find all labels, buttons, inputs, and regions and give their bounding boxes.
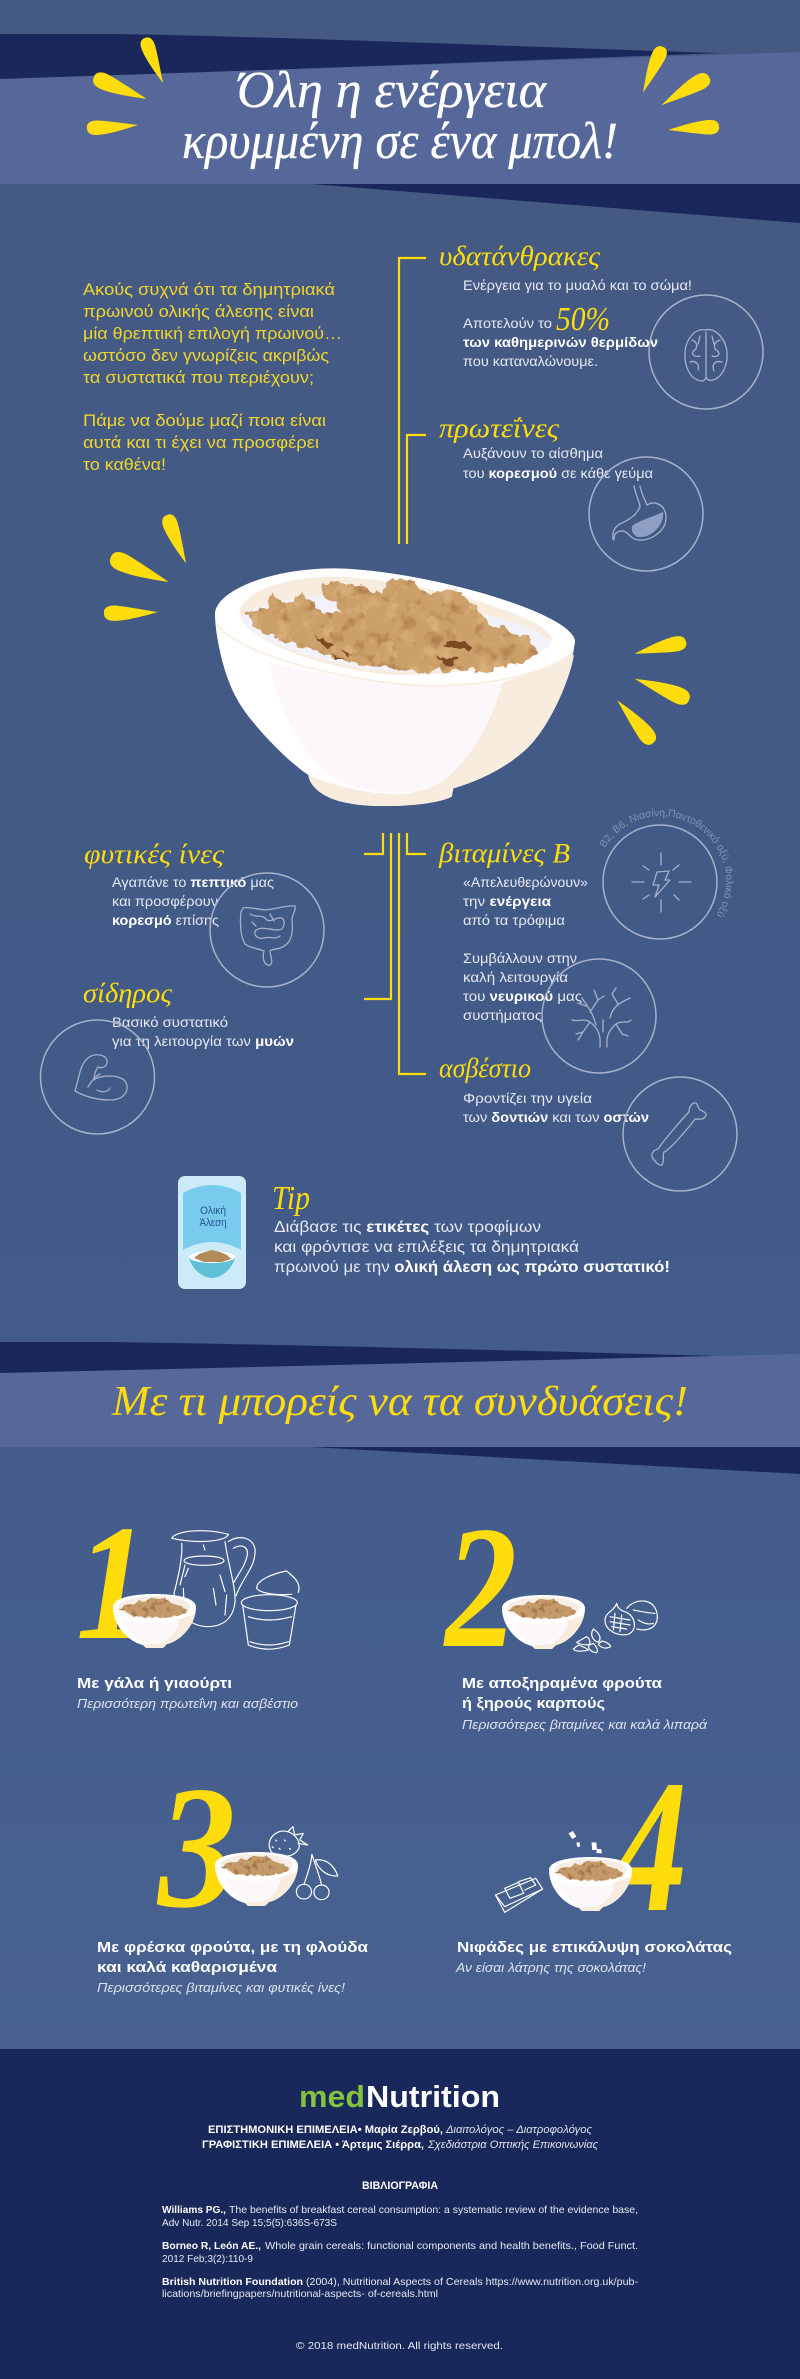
text: carbohydrates: που καταναλώνουμε.: [463, 353, 598, 369]
tip text: πρωινού με την ολική άλεση ως πρώτο συστατικό!: [274, 1259, 670, 1276]
caption 2: ή ξηρούς καρπούς: [462, 1695, 605, 1712]
card bowl: [189, 1250, 235, 1278]
card label: Άλεση: [200, 1217, 226, 1229]
text: fibre: κορεσμό επίσης: [112, 912, 219, 928]
caption 4: Νιφάδες με επικάλυψη σοκολάτας: [457, 1939, 732, 1956]
caption 4: [455, 1939, 732, 1975]
caption 3: Περισσότερες βιταμίνες και φυτικές ίνες!: [97, 1980, 345, 1995]
references: Williams PG.,: [162, 2204, 226, 2216]
tip text: Διάβασε τις ετικέτες των τροφίμων: [274, 1219, 541, 1236]
icon: rays left of bowl: [104, 512, 193, 621]
panel: iron: [40, 978, 294, 1134]
icon: brain: [649, 295, 763, 409]
intro text: πρωινού ολικής άλεσης είναι: [83, 303, 314, 321]
credits: Σχεδιάστρια Οπτικής Επικοινωνίας: [427, 2139, 599, 2151]
text: vitamins B: την ενέργεια: [463, 893, 551, 909]
text: carbohydrates: Ενέργεια για το μυαλό και το σώμα!: [463, 277, 692, 293]
icon: title rays right: [636, 44, 720, 137]
icon: rays right of bowl: [611, 634, 692, 748]
logo: Nutrition: [366, 2079, 500, 2114]
text: calcium: [463, 1090, 649, 1125]
icon: bone: [623, 1077, 737, 1191]
text: fibre: Αγαπάνε το πεπτικό μας: [112, 874, 274, 890]
combo 3: [97, 1750, 369, 1995]
text: vitamins B: Συμβάλλουν στην: [463, 950, 577, 966]
intro text: Ακούς συχνά ότι τα δημητριακά: [83, 281, 336, 299]
references: Adv Nutr. 2014 Sep 15;5(5):636S-673S: [162, 2217, 337, 2229]
icon: energy bolt: [603, 825, 717, 939]
card label: Ολική: [200, 1205, 226, 1217]
caption 2: [462, 1675, 708, 1732]
second band: [0, 1342, 800, 1474]
card label: [200, 1205, 226, 1229]
icon: strawberry and cherries: [269, 1827, 338, 1900]
caption 2: Περισσότερες βιταμίνες και καλά λιπαρά: [462, 1717, 708, 1732]
caption 1: [77, 1675, 298, 1711]
footer panel: [0, 2049, 800, 2379]
icon: intestines: [210, 873, 324, 987]
title: [182, 62, 618, 170]
references: British Nutrition Foundation: [162, 2276, 303, 2288]
caption 3: και καλά καθαρισμένα: [97, 1959, 278, 1976]
intro text: ωστόσο δεν γνωρίζεις ακριβώς: [83, 347, 329, 365]
caption 3: [97, 1939, 369, 1995]
credits: [202, 2124, 599, 2151]
intro text: [83, 281, 342, 474]
combo 4: [455, 1742, 732, 1975]
text: calcium: των δοντιών και των οστών: [463, 1109, 649, 1125]
small bowl: [215, 1852, 298, 1906]
text: iron: για τη λειτουργία των μυών: [112, 1033, 294, 1049]
panel: fibre: [84, 839, 324, 987]
intro text: Πάμε να δούμε μαζί ποια είναι: [83, 412, 326, 430]
icon: jug and yogurt: [172, 1531, 299, 1649]
text: proteins: [463, 445, 653, 481]
panel: proteins: [439, 413, 703, 571]
upper brackets: [399, 258, 426, 544]
text: vitamins B: «Απελευθερώνουν»: [463, 874, 588, 890]
text: carbohydrates: Αποτελούν το: [463, 315, 552, 331]
references: lications/briefingpapers/nutritional-aspects- of-cereals.html: [162, 2288, 438, 2300]
intro text: το καθένα!: [83, 456, 166, 474]
references: [162, 2204, 639, 2300]
small bowl: [502, 1595, 585, 1649]
references: The benefits of breakfast cereal consumption: a systematic review of the evidence base,: [229, 2204, 638, 2216]
small bowl: [113, 1594, 196, 1648]
heading: proteins: πρωτεΐνες: [439, 413, 560, 443]
intro text: μία θρεπτική επιλογή πρωινού…: [83, 325, 342, 343]
icon: nervous system: [542, 959, 656, 1073]
text: vitamins B: του νευρικού μας: [463, 988, 582, 1004]
tip text: και φρόντισε να επιλέξεις τα δημητριακά: [274, 1239, 579, 1256]
heading: tip: Tip: [272, 1180, 310, 1217]
combo 2: [443, 1490, 708, 1732]
combo 1: [76, 1491, 299, 1711]
icon: title rays left: [86, 35, 169, 136]
icon: chocolate and flakes: [495, 1831, 602, 1912]
panel: calcium: [439, 1053, 737, 1191]
curved label: B vitamins list: Β2, Β6, Νιασίνη,Παντοθενικό οξύ, Φολικό οξύ: [599, 808, 734, 918]
references: Borneo R, León AE.,: [162, 2240, 261, 2252]
tip card: [178, 1176, 246, 1289]
text: iron: [112, 1014, 294, 1049]
text: proteins: Αυξάνουν το αίσθημα: [463, 445, 603, 461]
heading: calcium: ασβέστιο: [439, 1053, 531, 1083]
heading: vitamins B: βιταμίνες Β: [438, 838, 570, 868]
number 1: 1: [76, 1491, 148, 1674]
intro text: τα συστατικά που περιέχουν;: [83, 369, 314, 387]
number 2: 2: [443, 1490, 517, 1684]
section heading: Με τι μπορείς να τα συνδυάσεις!: [111, 1379, 688, 1425]
heading: iron: σίδηρος: [83, 978, 173, 1008]
text: vitamins B: καλή λειτουργία: [463, 969, 568, 985]
icon: figs and almonds: [573, 1601, 657, 1653]
icon: stomach: [589, 457, 703, 571]
caption 2: Με αποξηραμένα φρούτα: [462, 1675, 663, 1692]
caption 3: Με φρέσκα φρούτα, με τη φλούδα: [97, 1939, 369, 1956]
icon: muscle arm: [40, 1020, 154, 1134]
heading: carbohydrates: υδατάνθρακες: [439, 241, 601, 271]
text: vitamins B: [463, 874, 588, 1023]
lower brackets: [364, 833, 426, 1074]
bibliography heading: ΒΙΒΛΙΟΓΡΑΦΙΑ: [362, 2180, 438, 2192]
references: Whole grain cereals: functional components and health benefits., Food Funct.: [265, 2240, 638, 2252]
references: 2012 Feb;3(2):110-9: [162, 2253, 253, 2265]
copyright: © 2018 medNutrition. All rights reserved.: [296, 2340, 503, 2352]
credits: ΕΠΙΣΤΗΜΟΝΙΚΗ ΕΠΙΜΕΛΕΙΑ• Μαρία Ζερβού,: [208, 2124, 443, 2136]
intro text: αυτά και τι έχει να προσφέρει: [83, 434, 319, 452]
text: calcium: Φροντίζει την υγεία: [463, 1090, 592, 1106]
caption 1: Περισσότερη πρωτεΐνη και ασβέστιο: [77, 1696, 298, 1711]
heading: fibre: φυτικές ίνες: [84, 839, 225, 869]
title: Όλη η ενέργεια: [237, 62, 548, 119]
number 4: 4: [613, 1742, 687, 1952]
credits: ΓΡΑΦΙΣΤΙΚΗ ΕΠΙΜΕΛΕΙΑ • Άρτεμις Σιέρρα,: [202, 2139, 424, 2151]
bowl of cereal: [215, 568, 575, 806]
tip text: [272, 1180, 670, 1276]
panel: vitamins B: [438, 808, 734, 1074]
number 3: 3: [156, 1750, 236, 1944]
panel: carbohydrates: [439, 241, 763, 409]
caption 4: Αν είσαι λάτρης της σοκολάτας!: [455, 1960, 646, 1975]
text: fibre: [112, 874, 274, 928]
text: proteins: του κορεσμού σε κάθε γεύμα: [463, 465, 653, 481]
text: iron: Βασικό συστατικό: [112, 1014, 228, 1030]
header band: [0, 34, 800, 223]
credits: Διαιτολόγος – Διατροφολόγος: [445, 2124, 593, 2136]
text: vitamins B: από τα τρόφιμα: [463, 912, 565, 928]
title: κρυμμένη σε ένα μπολ!: [182, 113, 618, 170]
text: carbohydrates: [463, 277, 692, 369]
references: (2004), Nutritional Aspects of Cereals https://www.nutrition.org.uk/pub-: [306, 2276, 639, 2288]
text: carbohydrates: 50%: [556, 301, 610, 338]
small bowl: [549, 1857, 632, 1911]
text: fibre: και προσφέρουν: [112, 893, 218, 909]
logo: med: [299, 2079, 365, 2114]
text: carbohydrates: των καθημερινών θερμίδων: [463, 334, 658, 350]
caption 1: Με γάλα ή γιαούρτι: [77, 1675, 232, 1692]
text: vitamins B: συστήματος: [463, 1007, 542, 1023]
